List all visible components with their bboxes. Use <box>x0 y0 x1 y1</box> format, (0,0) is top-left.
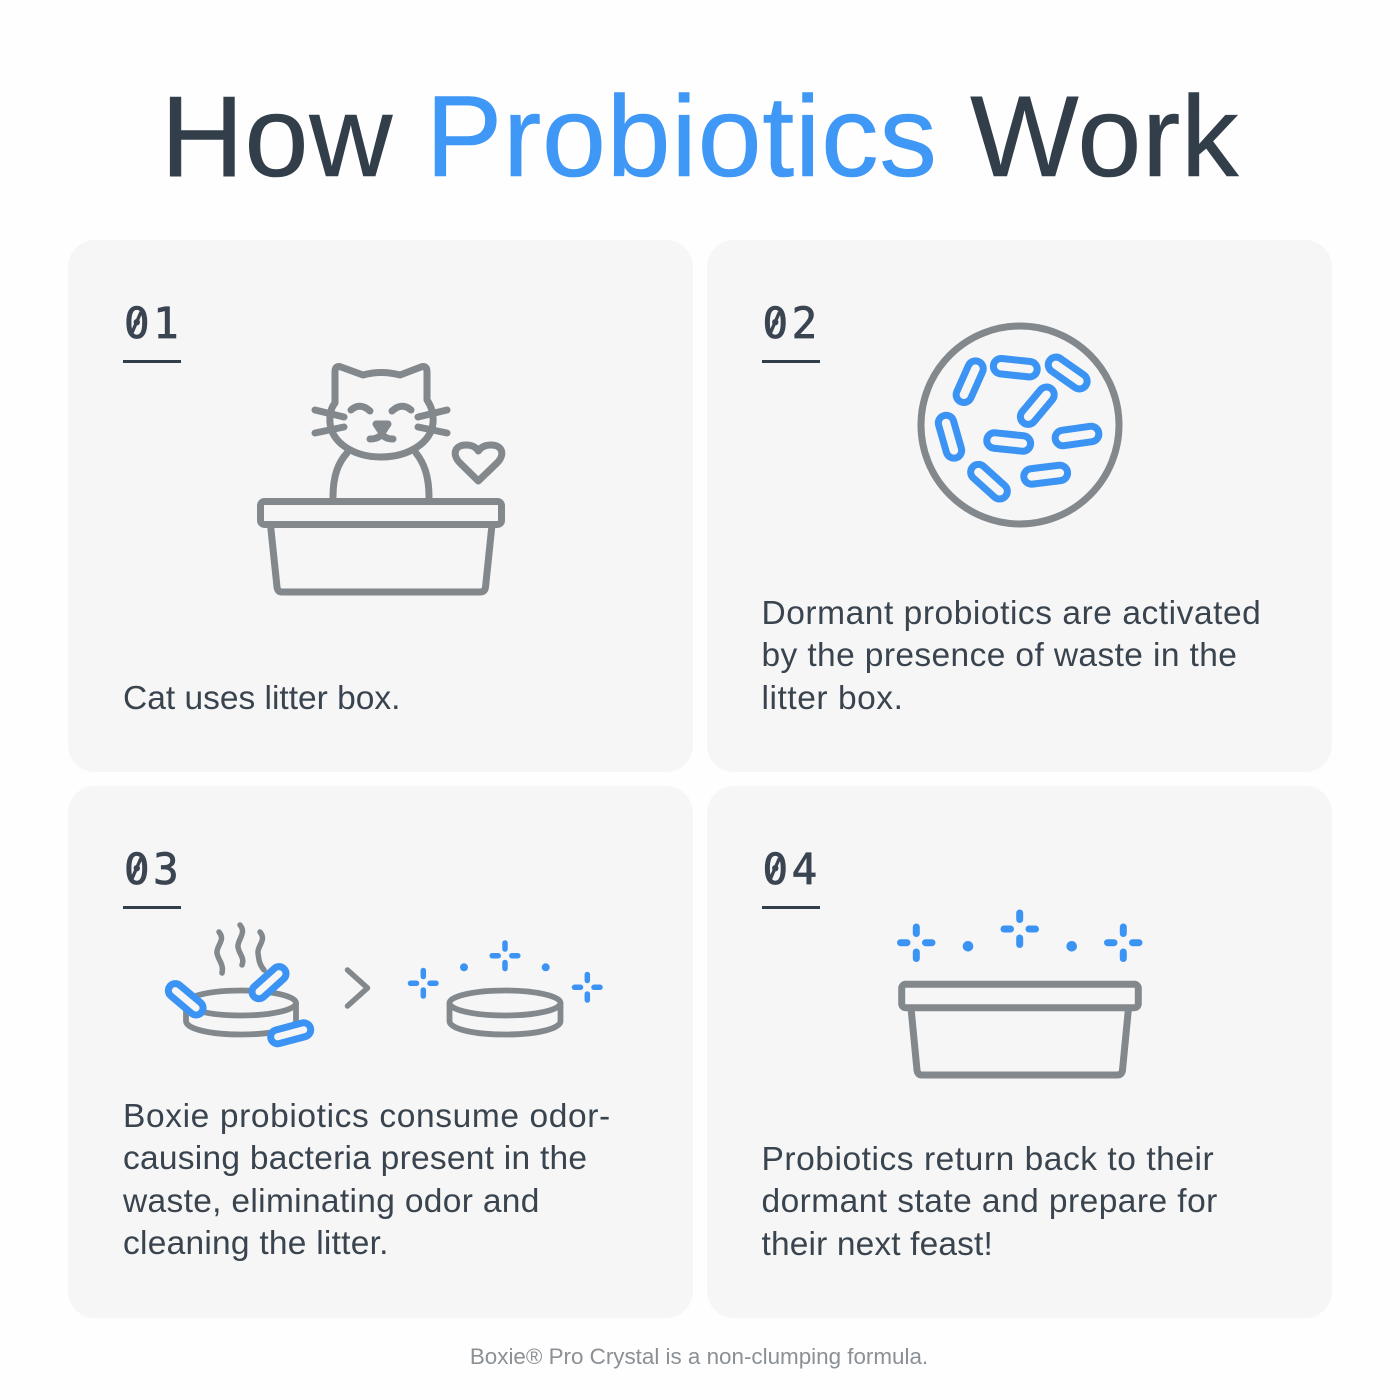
step 2 text: litter box. <box>762 680 903 717</box>
step 3 text <box>123 1098 611 1262</box>
litter box basin <box>270 525 492 592</box>
step 4 text: Probiotics return back to their <box>762 1141 1214 1178</box>
step 1 text: Cat uses litter box. <box>123 680 400 717</box>
icon: clean litter box with sparkles <box>900 913 1139 1075</box>
box rim <box>902 984 1138 1008</box>
sparkles <box>410 943 600 1000</box>
panel: step 3 <box>68 786 693 1318</box>
icon: dirty crystal with probiotics <box>165 925 312 1045</box>
step 2 text: by the presence of waste in the <box>762 637 1237 674</box>
step number 01: 01 <box>124 300 182 349</box>
panel: step 2 <box>707 240 1332 772</box>
step 4 text: their next feast! <box>762 1226 993 1263</box>
title: How Probiotics Work <box>161 73 1239 201</box>
crystal puck <box>186 990 296 1034</box>
cat whiskers <box>315 410 447 433</box>
step 2 text <box>762 595 1261 717</box>
icon: probiotics in circle <box>921 326 1119 524</box>
arrow: chevron <box>348 970 368 1006</box>
step 4 text: dormant state and prepare for <box>762 1183 1218 1220</box>
step 3 text: cleaning the litter. <box>123 1225 389 1262</box>
icon: clean crystal with sparkles <box>410 943 600 1034</box>
step 4 text <box>762 1141 1218 1263</box>
footnote: Boxie® Pro Crystal is a non-clumping formula. <box>470 1344 928 1369</box>
sparkle dots <box>963 941 1077 952</box>
step 3 text: Boxie probiotics consume odor- <box>123 1098 611 1135</box>
clean puck <box>450 990 560 1034</box>
step number 02: 02 <box>762 300 821 349</box>
step 2 text: Dormant probiotics are activated <box>762 595 1261 632</box>
step number 04: 04 <box>762 846 821 895</box>
steam <box>217 925 264 973</box>
litter box rim <box>260 502 502 524</box>
box basin <box>911 1008 1128 1075</box>
step 3 text: waste, eliminating odor and <box>123 1183 540 1220</box>
cat head <box>330 367 433 457</box>
heart <box>455 445 502 481</box>
probiotic rods <box>936 354 1100 502</box>
step 3 text: causing bacteria present in the <box>123 1140 587 1177</box>
probiotic rods on puck <box>165 964 312 1045</box>
sparkle dots <box>460 963 550 971</box>
icon: cat in litter box with heart <box>260 367 502 592</box>
cat body <box>333 453 429 497</box>
step number 03: 03 <box>124 846 182 895</box>
panel: step 1 <box>68 240 693 772</box>
cat nose and mouth <box>370 424 393 439</box>
sparkles <box>900 913 1139 958</box>
panel: step 4 <box>707 786 1332 1318</box>
circle outline <box>921 326 1119 524</box>
cat eyes <box>351 406 411 411</box>
